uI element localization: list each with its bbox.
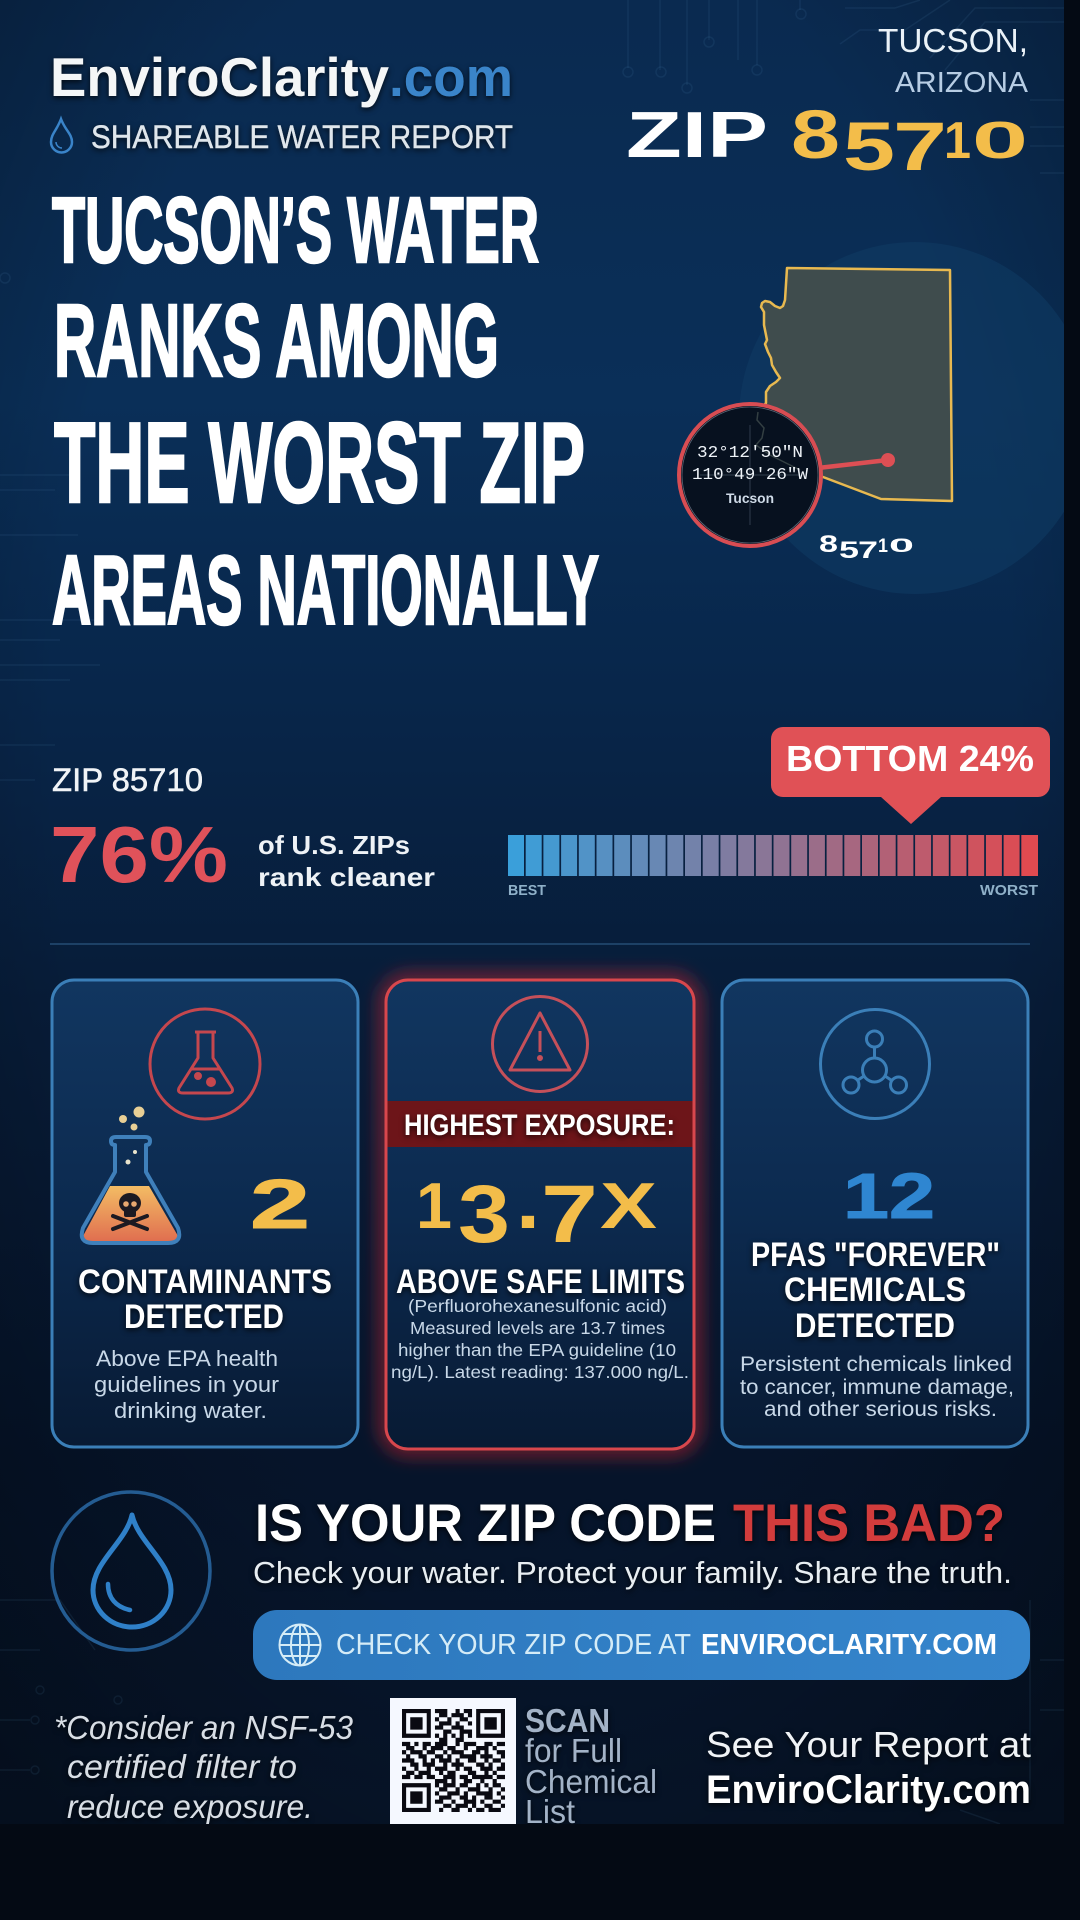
stat: 13.7X: .	[516, 1155, 540, 1246]
heading: ZIP 85710: ZIP	[626, 98, 768, 171]
icon: globe	[280, 1624, 320, 1666]
callout: bottom 24%: BOTTOM 24%	[786, 738, 1034, 779]
stat: 13.7X: 7	[541, 1169, 598, 1260]
icon: poison flask with skull	[82, 1106, 179, 1243]
banner: highest exposure	[388, 1101, 692, 1147]
main headline: THE WORST ZIP	[54, 400, 585, 527]
description: Above EPA health	[96, 1346, 278, 1371]
stat: 13.7X: 3	[458, 1169, 510, 1260]
rank stat: ZIP 85710, 76%	[50, 762, 435, 899]
background circle behind map	[787, 243, 1064, 594]
description	[94, 1346, 279, 1423]
rank stat: ZIP 85710, 76%: ZIP 85710	[52, 762, 203, 798]
text: scan for full chemical list: Chemical	[525, 1763, 657, 1800]
label: PFAS forever chemicals detected: CHEMICALS	[784, 1271, 966, 1309]
label: contaminants detected: DETECTED	[124, 1298, 284, 1336]
map label: 85710: 7	[858, 537, 878, 564]
description: to cancer, immune damage,	[740, 1376, 1014, 1399]
description: drinking water.	[114, 1398, 267, 1423]
text: scan for full chemical list: List	[525, 1793, 575, 1830]
rank bar: best to worst	[508, 835, 1038, 899]
label: PFAS forever chemicals detected: PFAS "FOREVER"	[751, 1236, 1000, 1274]
map label: 85710: 0	[889, 536, 914, 557]
icon: molecule	[820, 1010, 930, 1118]
call to action heading	[255, 1494, 1005, 1553]
note: NSF-53 filter: *Consider an NSF-53	[54, 1709, 354, 1746]
callout: coordinates circle with pointer: 32°12'50"N	[697, 444, 803, 463]
description	[391, 1296, 689, 1382]
logo: EnviroClarity.com: .com	[389, 46, 513, 108]
description	[740, 1353, 1014, 1421]
main headline: AREAS NATIONALLY	[52, 535, 599, 645]
banner: highest exposure: HIGHEST EXPOSURE:	[404, 1109, 675, 1142]
stat: 12: 12	[843, 1160, 935, 1232]
text: scan for full chemical list: SCAN	[525, 1702, 610, 1739]
footer: see your report	[706, 1724, 1031, 1812]
location: Tucson, Arizona: ARIZONA	[895, 67, 1029, 99]
main headline: RANKS AMONG	[54, 283, 499, 398]
text: scan for full chemical list: for Full	[525, 1732, 622, 1769]
icon: flask in circle	[150, 1009, 260, 1119]
note: NSF-53 filter	[54, 1709, 354, 1825]
button: check your zip code: CHECK YOUR ZIP CODE AT	[336, 1629, 691, 1661]
map label: 85710: 8	[819, 531, 838, 558]
call to action subheading: Check your water. Protect your family. Share the truth.	[253, 1555, 1012, 1590]
note: NSF-53 filter: certified filter to	[67, 1748, 297, 1785]
rank bar: best to worst: BEST	[508, 882, 546, 899]
callout: coordinates circle with pointer	[679, 404, 895, 546]
label: PFAS forever chemicals detected	[751, 1236, 1000, 1345]
logo: EnviroClarity.com: EnviroClarity	[50, 46, 389, 108]
heading: ZIP 85710: 1	[944, 112, 971, 170]
call to action heading: THIS BAD?	[733, 1494, 1005, 1553]
subtitle: shareable water report: SHAREABLE WATER REPORT	[91, 119, 513, 155]
stat: 13.7X: 1	[416, 1169, 452, 1242]
rank bar: best to worst: WORST	[980, 882, 1038, 899]
callout: bottom 24%	[771, 727, 1050, 824]
footer: see your report: See Your Report at	[706, 1724, 1031, 1765]
location: Tucson, Arizona: TUCSON,	[878, 22, 1028, 59]
label: PFAS forever chemicals detected: DETECTED	[795, 1307, 955, 1345]
description: Persistent chemicals linked	[740, 1353, 1012, 1376]
callout: coordinates circle with pointer: Tucson	[726, 490, 774, 506]
call to action heading: IS YOUR ZIP CODE	[255, 1494, 716, 1553]
panel: highest exposure	[386, 980, 694, 1449]
description: ng/L). Latest reading: 137.000 ng/L.	[391, 1362, 689, 1382]
QR code	[390, 1698, 516, 1824]
note: NSF-53 filter: reduce exposure.	[67, 1788, 313, 1825]
label: contaminants detected	[78, 1263, 332, 1336]
rank stat: ZIP 85710, 76%: of U.S. ZIPs	[258, 830, 410, 860]
description: and other serious risks.	[764, 1398, 997, 1421]
stat: 13.7X: X	[600, 1169, 657, 1242]
label: contaminants detected: CONTAMINANTS	[78, 1263, 332, 1301]
heading: ZIP 85710: 8	[791, 96, 840, 173]
description: higher than the EPA guideline (10	[398, 1340, 676, 1360]
stat: 2: 2	[250, 1165, 310, 1243]
icon: warning triangle	[492, 996, 588, 1092]
heading: ZIP 85710: 5	[843, 108, 895, 185]
heading: ZIP 85710: 0	[972, 112, 1028, 170]
panel: contaminants detected	[52, 980, 358, 1447]
text: scan for full chemical list	[525, 1708, 656, 1824]
description: guidelines in your	[94, 1372, 279, 1397]
rank stat: ZIP 85710, 76%: 76%	[50, 810, 228, 899]
heading: ZIP 85710	[626, 96, 1028, 185]
rank stat: ZIP 85710, 76%: rank cleaner	[258, 862, 435, 892]
icon: water drop in circle	[52, 1492, 210, 1650]
map label: 85710: 5	[839, 537, 859, 564]
heading: ZIP 85710: 7	[893, 108, 947, 185]
label: above safe limits: ABOVE SAFE LIMITS	[396, 1263, 685, 1301]
location: Tucson, Arizona	[878, 22, 1029, 99]
button: check your zip code	[253, 1610, 1030, 1680]
map label: 85710: 1	[878, 536, 888, 557]
map: Arizona outline	[757, 268, 952, 501]
main headline: TUCSON’S WATER	[52, 178, 539, 282]
button: check your zip code: ENVIROCLARITY.COM	[701, 1629, 997, 1661]
footer: see your report: EnviroClarity.com	[706, 1768, 1031, 1812]
callout: coordinates circle with pointer: 110°49'26"W	[692, 466, 809, 485]
icon: water drop	[51, 119, 72, 152]
main headline	[52, 178, 599, 645]
description: Measured levels are 13.7 times	[410, 1318, 665, 1338]
panel: PFAS forever chemicals	[722, 980, 1028, 1447]
description: (Perfluorohexanesulfonic acid)	[408, 1296, 667, 1316]
